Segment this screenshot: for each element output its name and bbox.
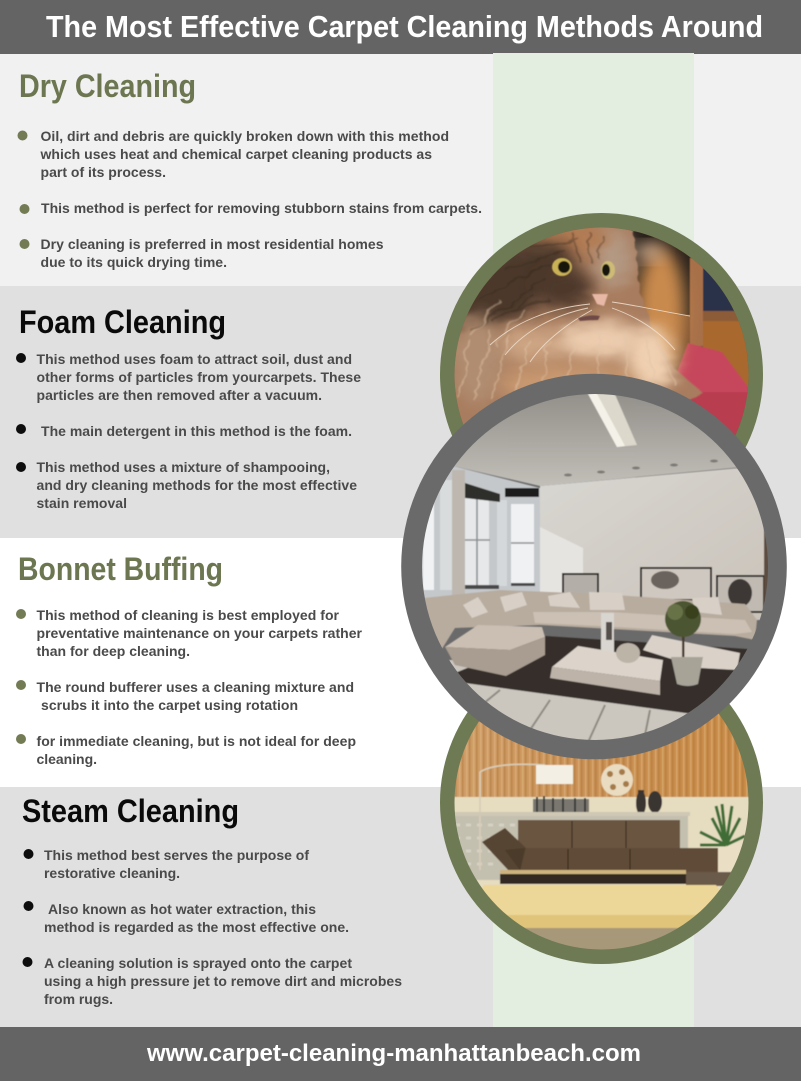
website url: www.carpet-cleaning-manhattanbeach.com — [146, 1040, 641, 1067]
circle photo: bottom room with brown sofa — [440, 704, 763, 964]
bullet: cleaning solution sprayed — [22, 955, 402, 1007]
bullet: oil, dirt and debris — [18, 128, 449, 180]
bullet: restorative cleaning — [24, 847, 309, 881]
cat eyes and nose — [552, 258, 615, 321]
heading: steam cleaning: Steam Cleaning — [22, 793, 239, 829]
bullet: stubborn stains: This method is perfect for removing stubborn stains from carpets. — [41, 200, 482, 216]
panel: dry cleaning background — [0, 54, 801, 286]
bullet: cleaning solution sprayed: A cleaning solution is sprayed onto the carpet — [44, 955, 352, 971]
dark area rug — [455, 636, 762, 714]
decorative dandelion ball — [601, 764, 633, 796]
bullet: residential homes: due to its quick drying time. — [40, 254, 227, 270]
bullet: foam attracts soil — [16, 351, 361, 403]
black vases — [636, 790, 662, 815]
books — [533, 796, 589, 813]
section: steam cleaning — [22, 793, 402, 1007]
bullet: preventative maintenance: than for deep cleaning. — [36, 643, 190, 659]
bullet: foam attracts soil: particles are then removed after a vacuum. — [36, 387, 322, 403]
bullet: hot water extraction: Also known as hot water extraction, this — [48, 901, 316, 917]
bullet: mixture of shampooing: stain removal — [36, 495, 127, 511]
beige sectional sofa — [424, 590, 757, 676]
bullet: oil, dirt and debris: part of its process. — [40, 164, 166, 180]
wall pictures — [563, 568, 764, 612]
cat fur body — [454, 228, 703, 425]
section: dry cleaning — [18, 68, 482, 270]
skylight — [596, 394, 637, 446]
top title bar — [0, 0, 801, 54]
circle photo: cat — [440, 213, 763, 448]
bullet: round bufferer — [16, 679, 354, 713]
bullet: preventative maintenance — [16, 607, 363, 659]
heading: dry cleaning: Dry Cleaning — [19, 68, 196, 104]
bullet: oil, dirt and debris: which uses heat and chemical carpet cleaning products as — [40, 146, 432, 162]
floor lamp — [480, 764, 573, 870]
heading: bonnet buffing: Bonnet Buffing — [18, 551, 223, 587]
bullet: mixture of shampooing: and dry cleaning methods for the most effective — [36, 477, 357, 493]
bullet: oil, dirt and debris: Oil, dirt and debris are quickly broken down with this method — [40, 128, 449, 144]
bullet: mixture of shampooing: This method uses a mixture of shampooing, — [36, 459, 330, 475]
bullet: main detergent: The main detergent in this method is the foam. — [41, 423, 352, 439]
bullet: restorative cleaning: This method best serves the purpose of — [44, 847, 309, 863]
pale green vertical stripe — [493, 53, 694, 1027]
bullet: preventative maintenance: preventative maintenance on your carpets rather — [36, 625, 363, 641]
bullet: cleaning solution sprayed: from rugs. — [44, 991, 113, 1007]
bullet: immediate cleaning: for immediate cleaning, but is not ideal for deep — [36, 733, 356, 749]
title: The Most Effective Carpet Cleaning Methods Around — [46, 9, 763, 44]
circle photo: living room — [401, 374, 787, 760]
bullet: immediate cleaning: cleaning. — [36, 751, 97, 767]
shaggy yellow rug — [482, 884, 720, 916]
windows — [420, 466, 540, 610]
bullet: restorative cleaning: restorative cleaning. — [44, 865, 180, 881]
panel: steam cleaning background — [0, 787, 801, 1027]
cat whiskers — [490, 302, 690, 362]
white partition — [540, 528, 584, 593]
floor — [449, 659, 688, 740]
planter and plant — [699, 803, 745, 848]
bullet: residential homes — [20, 236, 384, 270]
bullet: foam attracts soil: other forms of particles from yourcarpets. These — [36, 369, 361, 385]
heading: foam cleaning: Foam Cleaning — [19, 304, 226, 340]
bullet: preventative maintenance: This method of cleaning is best employed for — [36, 607, 340, 623]
bullet: foam attracts soil: This method uses foam to attract soil, dust and — [36, 351, 352, 367]
bullet: round bufferer: The round bufferer uses a cleaning mixture and — [36, 679, 354, 695]
bullet: immediate cleaning — [16, 733, 356, 767]
potted plant — [665, 601, 703, 686]
panel: bonnet buffing background — [0, 538, 801, 787]
bullet: hot water extraction — [24, 901, 349, 935]
bottom website bar — [0, 1027, 801, 1081]
white coffee tables — [550, 635, 740, 695]
bullet: cleaning solution sprayed: using a high pressure jet to remove dirt and microbes — [44, 973, 402, 989]
bullet: hot water extraction: method is regarded as the most effective one. — [44, 919, 349, 935]
section: foam cleaning — [16, 304, 361, 511]
section: bonnet buffing — [16, 551, 363, 767]
bullet: residential homes: Dry cleaning is preferred in most residential homes — [40, 236, 384, 252]
panel: foam cleaning background — [0, 286, 801, 538]
bullet: mixture of shampooing — [16, 459, 357, 511]
bullet: round bufferer: scrubs it into the carpet using rotation — [41, 697, 298, 713]
recessed lights — [564, 460, 718, 476]
brown sofa — [482, 820, 718, 884]
